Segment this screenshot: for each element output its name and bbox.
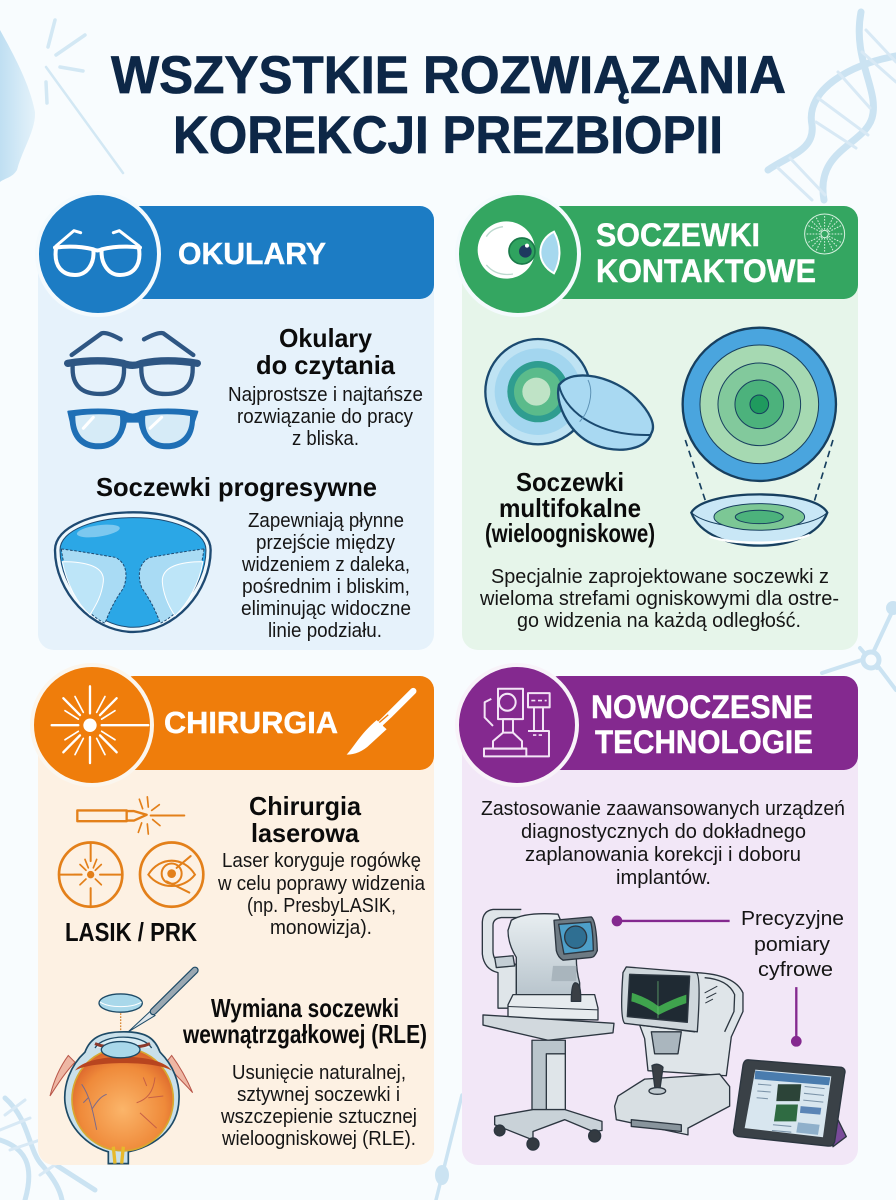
label: precyzyjne pomiary cyfrowe: cyfrowe <box>758 958 833 981</box>
title: KOREKCJI PREZBIOPII <box>173 106 723 165</box>
header: nowoczesne technologie <box>457 665 858 785</box>
icon: glasses <box>55 231 140 275</box>
heading: wymiana soczewki <box>182 993 427 1049</box>
title: WSZYSTKIE ROZWIĄZANIA <box>111 46 786 105</box>
heading: soczewki multifokalne: Soczewki <box>516 467 624 497</box>
label: precyzyjne pomiary cyfrowe: pomiary <box>754 933 831 956</box>
text: soczewki progresywne: pośrednim i bliskim, <box>242 575 410 598</box>
text: chirurgia laserowa: w celu poprawy widzenia <box>217 872 426 895</box>
panel: soczewki kontaktowe <box>457 193 858 650</box>
text: wymiana soczewki: sztywnej soczewki i <box>237 1083 400 1106</box>
header: okulary <box>37 193 434 315</box>
text: soczewki multifokalne: Specjalnie zaprojektowane soczewki z <box>491 565 829 588</box>
text: chirurgia laserowa <box>217 849 426 939</box>
icon: laser device <box>77 797 184 834</box>
text: soczewki progresywne: przejście między <box>256 531 396 554</box>
heading: chirurgia laserowa: laserowa <box>251 818 360 848</box>
heading: soczewki multifokalne: multifokalne <box>499 493 641 523</box>
text: soczewki progresywne: widzeniem z daleka, <box>241 553 410 576</box>
text: technologie: Zastosowanie zaawansowanych urządzeń <box>481 797 845 820</box>
text: soczewki progresywne: linie podziału. <box>268 619 382 642</box>
text: okulary do czytania: Najprostsze i najtańsze <box>228 383 423 406</box>
text: chirurgia laserowa: (np. PresbyLASIK, <box>247 894 396 917</box>
icon: lens pattern <box>805 214 845 254</box>
header: soczewki kontaktowe: KONTAKTOWE <box>596 253 816 289</box>
illustration: oct scanner <box>615 967 743 1135</box>
text: soczewki multifokalne: go widzenia na każdą odległość. <box>517 609 801 632</box>
heading: soczewki progresywne: Soczewki progresywne <box>96 472 377 502</box>
header: chirurgia <box>32 665 434 785</box>
icon: progressive lens <box>55 512 211 632</box>
header: soczewki kontaktowe <box>457 193 858 315</box>
panel: chirurgia <box>32 665 434 1165</box>
icon: diagnostic device <box>484 689 550 756</box>
heading: okulary do czytania: do czytania <box>256 350 396 380</box>
text: soczewki multifokalne: wieloma strefami ogniskowymi dla ostre- <box>479 587 839 610</box>
icon: multifocal lens zones <box>683 328 836 546</box>
illustration: eye cross-section <box>50 970 195 1164</box>
text: wymiana soczewki: Usunięcie naturalnej, <box>232 1061 406 1084</box>
heading: okulary do czytania <box>256 323 396 380</box>
label: precyzyjne pomiary cyfrowe <box>741 907 844 981</box>
label: lasik prk: LASIK / PRK <box>65 917 197 947</box>
title <box>111 46 786 165</box>
text: technologie: diagnostycznych do dokładnego <box>521 820 806 843</box>
heading: soczewki multifokalne <box>485 467 655 548</box>
icon: eye with laser <box>140 843 203 907</box>
icon: reading glasses <box>68 333 197 448</box>
text: okulary do czytania: rozwiązanie do pracy <box>237 405 414 428</box>
icon: scalpel <box>347 691 413 755</box>
heading: chirurgia laserowa: Chirurgia <box>249 791 362 821</box>
icon: laser burst <box>52 686 148 763</box>
text: soczewki progresywne <box>241 509 411 642</box>
text: okulary do czytania: z bliska. <box>292 427 359 450</box>
heading: soczewki multifokalne: (wieloogniskowe) <box>485 518 655 548</box>
header: chirurgia: CHIRURGIA <box>164 705 338 740</box>
illustration: autorefractor on table <box>482 909 614 1150</box>
heading: chirurgia laserowa <box>249 791 362 848</box>
callout lines <box>612 916 802 1047</box>
text: technologie: zaplanowania korekcji i doboru <box>525 843 801 866</box>
text: soczewki progresywne: eliminując widoczne <box>241 597 411 620</box>
panel: okulary <box>37 193 434 650</box>
text: technologie <box>481 797 845 889</box>
text: wymiana soczewki: wszczepienie sztucznej <box>220 1105 417 1128</box>
heading: okulary do czytania: Okulary <box>279 323 373 353</box>
text: technologie: implantów. <box>616 866 711 889</box>
illustration: tablet <box>733 1060 846 1147</box>
header: okulary: OKULARY <box>178 236 326 271</box>
text: chirurgia laserowa: monowizja). <box>270 916 372 939</box>
text: soczewki multifokalne <box>479 565 839 632</box>
text: wymiana soczewki <box>220 1061 417 1150</box>
panel: nowoczesne technologie <box>457 665 858 1165</box>
icon: contact lenses <box>485 339 653 450</box>
text: soczewki progresywne: Zapewniają płynne <box>248 509 404 532</box>
label: precyzyjne pomiary cyfrowe: Precyzyjne <box>741 907 844 930</box>
text: chirurgia laserowa: Laser koryguje rogówkę <box>222 849 421 872</box>
header: nowoczesne technologie: NOWOCZESNE <box>591 689 813 725</box>
heading: wymiana soczewki: wewnątrzgałkowej (RLE) <box>182 1019 427 1049</box>
heading: wymiana soczewki: Wymiana soczewki <box>211 993 399 1023</box>
text: okulary do czytania <box>228 383 423 450</box>
icon: eye and contact lens <box>478 221 559 279</box>
icon: lasik target <box>59 843 122 907</box>
text: wymiana soczewki: wieloogniskowej (RLE). <box>221 1127 416 1150</box>
header: nowoczesne technologie: TECHNOLOGIE <box>595 724 813 760</box>
header: soczewki kontaktowe: SOCZEWKI <box>596 217 760 253</box>
